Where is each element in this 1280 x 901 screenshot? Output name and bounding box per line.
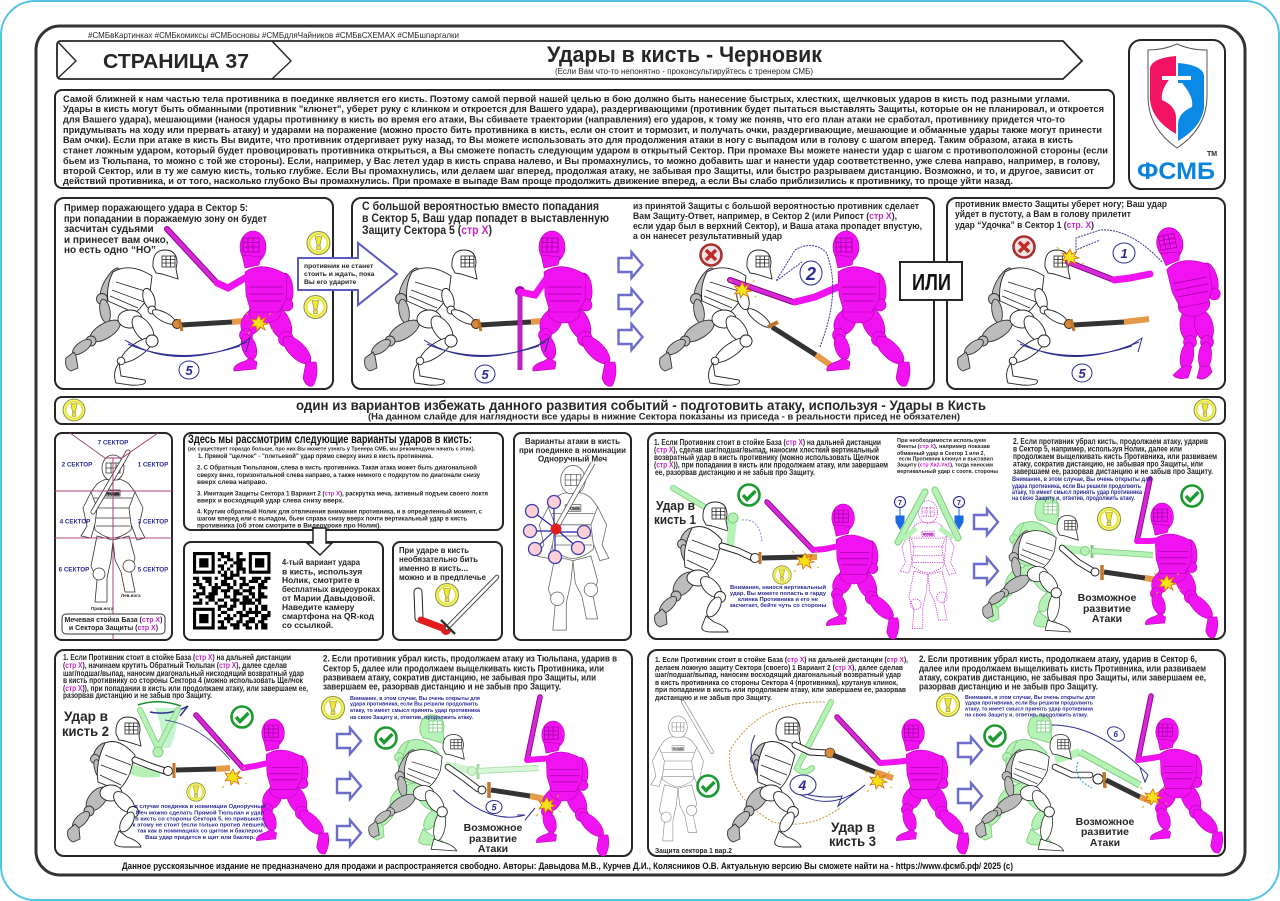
panel: forearm: необязательно бить (399, 554, 478, 564)
fighters development (983, 479, 1218, 638)
panel: intro text: бьем из Тюльпана, то можно с той же стороны). Если, например, у Вас летел удар в кисть справа налево, и Вы промахнулись, то можно добавить шаг и нанести удар соответственно, уже слева направо, например, в голову, (63, 156, 1100, 167)
QR text: бесплатных видеоуроках (282, 584, 380, 594)
label strike 1: кисть 1 (654, 512, 696, 527)
panel: strike 3: 1. Если Противник стоит в стойке База (стр Х) на дальней дистанции (стр Х), (655, 655, 908, 664)
panel: intro text (55, 90, 1114, 188)
QR code (193, 552, 270, 630)
feint note: При необходимости используем (897, 437, 986, 444)
feint note: обманный удар в Сектор 1 или 2, (897, 450, 985, 457)
blue warning text: атаку, то имеет смысл принять удар противника (1012, 490, 1143, 496)
panel: intro text: станет ложным ударом, который будет провоцировать противника открыться, а Вы сможете попасть следующим ударом в открытый Сектор. При промахе Вы можете нанести удар с шагом с противоположной стороны (если (63, 146, 1108, 156)
blue warning text (1012, 477, 1152, 502)
panel: strike 2: разорвав дистанцию и не забыв про Защиту. (63, 691, 212, 700)
logo FSMB: ТМ (1207, 151, 1217, 158)
panel: example strike: при попадании в поражаемую зону он будет (64, 213, 267, 225)
badge 6 (1105, 724, 1127, 744)
icon: check (376, 728, 396, 748)
panel: intro text: Самой ближней к нам частью тела противника в поединке является его кисть. Поэтому самой первой нашей целью в бою должно быть нанесение быстрых, хлестких, щелчковых ударов в кисть под разными углами. (63, 94, 1070, 105)
label strike 2 (62, 708, 109, 739)
panel: sectors: 3 СЕКТОР (138, 518, 168, 526)
QR text: 4-тый вариант удара (282, 557, 360, 567)
panel: sectors: 1 СЕКТОР (138, 462, 168, 468)
blue warning text: Внимание, в этом случае, Вы очень открыты для (965, 695, 1095, 701)
logo FSMB (1129, 40, 1225, 189)
fighters development (369, 697, 609, 856)
caption: Возможное (1076, 816, 1135, 828)
label strike 1 (654, 498, 696, 527)
fighters strike 3 (728, 702, 969, 854)
panel: one-handed sword: Варианты атаки в кисть (525, 436, 620, 446)
text part 2: 2. Если противник убрал кисть, продолжаем атаку, ударив в Сектор 6, (919, 654, 1197, 664)
QR text: со ссылкой. (282, 620, 333, 630)
OR box (900, 262, 962, 300)
marker 7 right: 7 (957, 500, 961, 507)
one-handed note: к этому не стоит (если только против левшей), (133, 822, 268, 828)
panel: variants list: шагом вперед или с выпадом, бьем справа снизу вверх почти вертикальный удар в кисть (197, 514, 467, 522)
text part 2: разорвав дистанцию и не забыв про Защиту. (919, 682, 1098, 692)
icon: warning (936, 694, 960, 716)
icon: cross (1014, 236, 1034, 258)
panel: variants list: 1. Прямой "щелчок" - "плетьевой" удар прямо сверху вниз в кисть противника. (198, 452, 433, 460)
panel: strike 2: в кисть противнику со стороны Сектора 4 (можно использовать Щелчок (63, 676, 304, 685)
icon: warning (773, 566, 791, 584)
panel: example strike: но есть одно “НО” (64, 245, 156, 256)
panel: withdraw variant: противник вместо Защиты уберет ногу; Ваш удар (955, 199, 1167, 209)
blue warning text: на свою Защиту и, ответив, продолжить атаку. (965, 712, 1088, 718)
text part 2: развиваем атаку, сократив дистанцию, не забывая про Защиты, или (323, 672, 596, 682)
blue warning text: на свою Защиту и, ответив, продолжить атаку. (350, 715, 473, 721)
panel: intro text: действий противника, и от того, насколько глубоко Вы промахнулись. При промахе в выпаде Вам проще продолжить движение вперед, а если Вы слабо приблизились к противнику, то проще уйти назад. (63, 176, 1013, 187)
badge 1: 1 (1120, 246, 1128, 261)
badge 5 (1072, 364, 1092, 382)
text part 2: атаку, сократив дистанцию, не забывая про Защиты, или (1013, 458, 1203, 468)
blue warning text: на свою Защиту и, ответив, продолжить атаку. (1012, 496, 1135, 502)
panel: strike 1: (стр Х)), при попадании в кисть или продолжаем атаку, или завершаем (654, 460, 888, 470)
banner: way to avoid: (На данном слайде для наглядности все удары в нижние Сектора показаны из приседа - в реальности присед не обязателен) (368, 412, 960, 422)
fighters defence (365, 231, 616, 386)
text part 2: Сектор 5, далее или продолжаем выщелкивать кисть Противника, или (323, 664, 604, 674)
badge 4 (790, 775, 816, 795)
caption (62, 614, 165, 634)
blue warning text: атаку, то имеет смысл принять удар противника (965, 706, 1094, 712)
icon: check (232, 706, 252, 728)
caption (1078, 592, 1137, 625)
fighters withdraw (958, 220, 1225, 385)
blue warning text: Внимание, в этом случае, Вы очень открыты для (1012, 477, 1152, 483)
text part 2: завершаем ее, разорвав дистанцию и не забыв про Защиту. (323, 682, 561, 692)
panel: strike 2: (стр Х)), при попадании в кисть или продолжаем атаку, или завершаем ее, (63, 684, 308, 693)
warning note: засчитает, бейте чуть со стороны (729, 602, 827, 609)
one-handed note (133, 803, 268, 841)
panel: strike 3: делаем ложную защиту Сектора (своего) 1 Вариант 2 (стр Х), далее сделав (655, 663, 903, 672)
panel: variants list: 2. С Обратным Тюльпаном, слева в кисть противника. Такая атака может быть диагональной (197, 464, 477, 472)
panel: probable defence: С большой вероятностью вместо попадания (362, 201, 599, 213)
panel: variants list: сверху вниз, горизонтальной слева направо, а также немного с подкрутом по диагонали снизу (197, 471, 480, 479)
panel: strike 3: при попадании в кисть или продолжаем атаку, или завершаем ее, разорвав (655, 685, 906, 694)
caption: Атаки (1090, 837, 1120, 849)
fighters counter (660, 231, 910, 386)
text part 2: далее или продолжаем выщелкивать кисть Противника, или развиваем (919, 664, 1206, 674)
panel: probable defence: а он нанесет результативный удар (633, 231, 782, 241)
panel: forearm: можно и в предплечье (399, 572, 486, 582)
marker 7 right (954, 496, 964, 529)
panel: forearm (393, 542, 502, 640)
panel: withdraw variant (947, 198, 1225, 389)
marker 7 left: 7 (898, 500, 902, 507)
icon: check (984, 726, 1006, 746)
blue warning text: атаку, то имеет смысл принять удар противника (350, 708, 481, 714)
magenta leaning fighter (1154, 220, 1225, 379)
page number: СТРАНИЦА 37 (103, 51, 249, 73)
badge 6: 6 (1114, 730, 1118, 739)
text part 2: 2. Если противник убрал кисть, продолжаем атаку из Тюльпана, ударив в (323, 654, 617, 664)
panel: variants list: вверх слева направо. (197, 479, 267, 486)
caption: развитие (1081, 826, 1129, 838)
callout arrow (298, 243, 397, 305)
feint note: вертикальный удар с соотв. стороны (897, 468, 998, 475)
icon: check (698, 776, 718, 796)
panel: example strike: и принесет вам очко, (64, 235, 169, 246)
panel: strike 2: (стр Х), начинаем крутить Обратный Тюльпан (стр Х), далее сделав (63, 661, 287, 670)
QR text: в кисть, используя (282, 566, 362, 576)
badge 4: 4 (798, 777, 806, 793)
panel: strike 3 (648, 650, 1225, 856)
panel: probable defence: из принятой Защиты с большой вероятностью противник сделает (633, 201, 919, 211)
icon: warning (1098, 508, 1120, 530)
panel: intro text: Вам очки). Если при атаке в кисть Вы видите, что противник отдергивает руку назад, то Вы можете использовать это для продолжения атаки в ногу с выпадом или в голову с шагом вперед. Таким образом, атака в кисть (63, 135, 1073, 146)
panel: probable defence: Вам Защиту-Ответ, например, в Сектор 2 (или Рипост (стр Х), (633, 211, 897, 221)
panel: forearm: именно в кисть... (399, 563, 468, 573)
caption: Атаки (478, 843, 508, 855)
logo FSMB: ФСМБ (1137, 158, 1215, 185)
text part 2: атаку, сократив дистанцию, не забывая про Защиты, или завершаем ее, (919, 672, 1206, 682)
badge 2 (800, 261, 822, 285)
fighters strike 1 (655, 488, 899, 639)
panel: variants list: Здесь мы рассмотрим следующие варианты ударов в кисть: (188, 434, 472, 446)
panel: strike 2: 1. Если Противник стоит в стойке База (стр Х) на дальней дистанции (63, 653, 291, 662)
icon: warning (187, 783, 205, 801)
caption: Возможное (1078, 592, 1137, 604)
feint note: Защиту (стр Ха2-Уа1), тогда наносим (897, 462, 993, 468)
banner: way to avoid (55, 397, 1225, 424)
feint note: Финты (стр Х), например показав (897, 444, 991, 450)
callout arrow: Вы его ударите (304, 279, 357, 286)
icon: check (738, 484, 760, 506)
callout arrow: стоить и ждать, пока (304, 271, 375, 278)
panel: probable defence (352, 198, 934, 389)
panel: intro text: придумывать на ходу или прервать атаку) и ударами на поражение (можно просто бить противника в кисть, если он стоит и тормозит, и получать очки, раздергивающие, мешающие и обманные удары также могут принести (63, 125, 1102, 136)
caption: Атаки (1092, 613, 1122, 625)
text part 2 (323, 654, 617, 692)
panel: strike 2: шаг/подшаг/выпад, наносим диагональный нисходящий возвратный удар (63, 669, 304, 678)
badge 5 (179, 361, 199, 379)
warning note: Внимание, нанося вертикальный (730, 584, 826, 591)
QR text: от Марии Давыдовой. (282, 593, 375, 603)
figure: defence sector 1 (651, 702, 712, 841)
text part 2 (919, 654, 1206, 692)
label strike 2: Удар в (64, 708, 108, 724)
badge 5 (475, 365, 495, 383)
caption: Защита сектора 1 вар.2 (655, 846, 732, 855)
badge 5 (486, 800, 502, 814)
fighters strike 2 (68, 702, 329, 854)
panel: variants list: вверх и восходящий удар слева снизу вверх. (197, 496, 344, 504)
warning icons (304, 232, 330, 318)
badge 2: 2 (805, 264, 816, 284)
text part 2: 2. Если противник убрал кисть, продолжаем атаку, ударив (1013, 436, 1208, 446)
label strike 3: Удар в (831, 819, 875, 835)
feint note (897, 437, 998, 475)
blue warning text (965, 695, 1095, 718)
QR text: смартфона на QR-код (282, 611, 375, 621)
caption (1076, 816, 1135, 849)
QR text (282, 557, 380, 630)
fighters (66, 229, 317, 386)
blue warning text: Внимание, в этом случае, Вы очень открыты для (350, 696, 480, 702)
OR box: ИЛИ (912, 269, 951, 295)
dotted pink figure (898, 490, 958, 629)
caption (464, 822, 523, 855)
arrows (337, 728, 361, 846)
panel: strike 3: в кисть противника со стороны Сектора 4 (противника), крутанув клинок, (655, 678, 898, 687)
panel: sectors: Прав.нога (91, 606, 114, 611)
arrows (958, 737, 982, 809)
panel: one-handed sword: Одноручный Меч (538, 454, 607, 464)
panel: strike 3: шаг/подшаг/выпад, наносим восходящий диагональный возвратный удар (655, 670, 901, 679)
panel: strike 1: возвратный удар в кисть противнику (можно использовать Щелчок (654, 453, 880, 462)
fighters development (976, 696, 1223, 853)
callout arrow: противник не станет (304, 263, 374, 270)
panel: variants list: противника (об этом смотрите в Видеоуроке про Нолик). (197, 522, 381, 530)
arrow down to QR (307, 528, 332, 555)
subtitle: (Если Вам что-то непонятно - проконсультируйтесь с тренером СМБ) (555, 67, 813, 76)
panel: example strike: засчитан судьями (64, 224, 154, 235)
one-handed note: в случае поединка в номинации Одноручный (134, 803, 266, 810)
label strike 3: кисть 3 (829, 833, 876, 849)
text part 2: завершаем ее, разорвав дистанцию и не забыв про Защиту. (1013, 466, 1213, 476)
panel: intro text: для Вашего удара), мешающими (нанося удары противнику в кисть во время его атаки, Вы сбиваете траектории (направления) его ударов, к тому же поняв, что его план атаки не сработал, противнику придется что-то (63, 114, 1065, 126)
text part 2: продолжаем выщелкивать кисть Противника, или развиваем (1013, 451, 1217, 461)
panel: sectors: 7 СЕКТОР (98, 440, 128, 446)
icon: warning (322, 696, 344, 720)
panel: one-handed sword: при поединке в номинации (519, 445, 626, 455)
warning note (729, 584, 827, 609)
panel: strike 1: ее, разорвав дистанцию и не забыв про Защиту. (655, 468, 815, 477)
panel: one-handed sword (514, 433, 631, 640)
badge 5: 5 (1078, 366, 1086, 381)
panel: example strike: Пример поражающего удара в Сектор 5: (64, 203, 248, 214)
icon: check (1182, 486, 1202, 506)
panel: probable defence: если удар был в верхний Сектор), и Ваша атака пропадет впустую, (633, 221, 922, 231)
panel: strike 2 (55, 650, 632, 856)
panel: sectors: 6 СЕКТОР (59, 566, 89, 574)
header banner (57, 41, 1082, 79)
panel: withdraw variant: уйдет в пустоту, а Вам в голову прилетит (955, 209, 1131, 219)
badge 5: 5 (482, 367, 490, 382)
panel: variants list (184, 433, 503, 530)
hashtags: #СМБвКартинках #СМБкомиксы #СМБосновы #СМБдляЧайников #СМБвСХЕМАХ #СМБшпаргалки (88, 30, 459, 40)
panel: withdraw variant: удар “Удочка” в Сектор 1 (стр. Х) (955, 220, 1094, 230)
panel: sectors: Лев.нога (121, 593, 141, 598)
blue warning text: удара противника, если Вы решили продолжить (1012, 484, 1141, 490)
caption: развитие (469, 833, 517, 845)
panel: example strike (55, 198, 333, 389)
panel: probable defence: Защиту Сектора 5 (стр Х) (362, 225, 492, 237)
warning note: удар, Вы можете попасть в гарду (730, 591, 827, 597)
footer: Данное русскоязычное издание не предназначено для продажи и распространяется свободно. Авторы: Давыдова М.В., Курчев Д.И., Колясников О.В. Актуальную версию Вы сможете найти на - https://www.фсмб.рф/ 2025 (с) (122, 861, 1013, 872)
feint note: если Противник клюнул и выставил (899, 456, 993, 462)
panel: strike 1: 1. Если Противник стоит в стойке База (стр Х) на дальней дистанции (654, 438, 881, 447)
marker 7 left (894, 496, 906, 529)
badge 5: 5 (186, 363, 194, 378)
QR text: Наведите камеру (282, 602, 355, 612)
caption: Мечевая стойка База (стр Х) (65, 616, 162, 624)
arm with sword (418, 577, 497, 635)
panel: sectors: 2 СЕКТОР (62, 462, 92, 468)
panel: variants list: 4. Крутим обратный Нолик для отвлечения внимания противника, и в определенный момент, с (197, 508, 482, 516)
one-handed note: в кисть со стороны Сектора 5, но привыкать (135, 816, 265, 822)
target dots (524, 496, 590, 564)
panel: sectors: 4 СЕКТОР (60, 518, 90, 526)
one-handed note: Ваш удар придется в щит или баклер. (145, 834, 255, 841)
icon: cross (700, 244, 722, 266)
blue warning text: удара противника, если Вы решили продолжить (350, 702, 478, 708)
title: Удары в кисть - Черновик (547, 42, 823, 67)
panel: intro text: второй Сектор, или в ту же самую кисть, только глубже. Если Вы промахнулись, или делаем шаг вперед, продолжая атаку, не забывая про Защиты, или быстро разрываем дистанцию. Возможно, и то, и другое, зависит от (63, 166, 1094, 177)
panel: QR code (184, 542, 383, 640)
text part 2 (1013, 436, 1217, 476)
panel: variants list: 3. Имитация Защиты Сектора 1 Вариант 2 (стр Х), раскрутка меча, активный подъем своего локтя (197, 490, 488, 498)
arrows (974, 509, 998, 584)
panel: strike 1: (стр Х), сделав шаг/подшаг/выпад, наносим хлесткий вертикальный (654, 446, 879, 454)
one-handed note: так как в номинациях со щитом и баклером (137, 828, 263, 834)
one-handed note: Меч можно сделать Прямой Тюльпан и удар (136, 810, 265, 816)
label strike 1: Удар в (656, 498, 695, 513)
warning note: клинка Противника и его не (738, 597, 819, 603)
panel: strike 3: дистанцию и не забыв про Защиту. (655, 693, 772, 702)
caption: развитие (1083, 603, 1131, 615)
QR text: Нолик, смотрите в (282, 575, 360, 585)
panel: sectors (55, 433, 172, 640)
panel: probable defence: в Сектор 5, Ваш удар попадет в выставленную (362, 213, 609, 225)
blue warning text (350, 696, 481, 721)
label strike 2: кисть 2 (62, 723, 109, 739)
panel: sectors: 5 СЕКТОР (138, 566, 168, 574)
text part 2: в Сектор 5, например, используя Нолик, далее или (1013, 444, 1182, 454)
blue warning text: удара противника, если Вы решили продолжить (965, 700, 1093, 706)
label strike 3 (829, 819, 876, 849)
caption: и Сектора Защиты (стр Х) (69, 625, 158, 632)
panel: forearm: При ударе в кисть (399, 545, 469, 555)
badge 1 (1113, 243, 1135, 263)
badge 5: 5 (492, 802, 498, 812)
caption: Возможное (464, 822, 523, 834)
arrows to counter (618, 252, 642, 350)
panel: strike 1 (648, 433, 1225, 639)
panel: variants list: (их существует гораздо больше, про них Вы можете узнать у Тренера СМБ, мы рекомендуем начать с этих). (188, 446, 475, 452)
panel: intro text: Удары в кисть могут быть обманными (противник "клюнет", уберет руку с клинком и откроется для Вашего удара), раздергивающими (противник будет пытаться выставлять Защиты, которые он не планировал, и откроется (63, 104, 1104, 115)
banner: way to avoid: один из вариантов избежать данного развития событий - подготовить атаку, используя - Удары в Кисть (296, 398, 986, 413)
